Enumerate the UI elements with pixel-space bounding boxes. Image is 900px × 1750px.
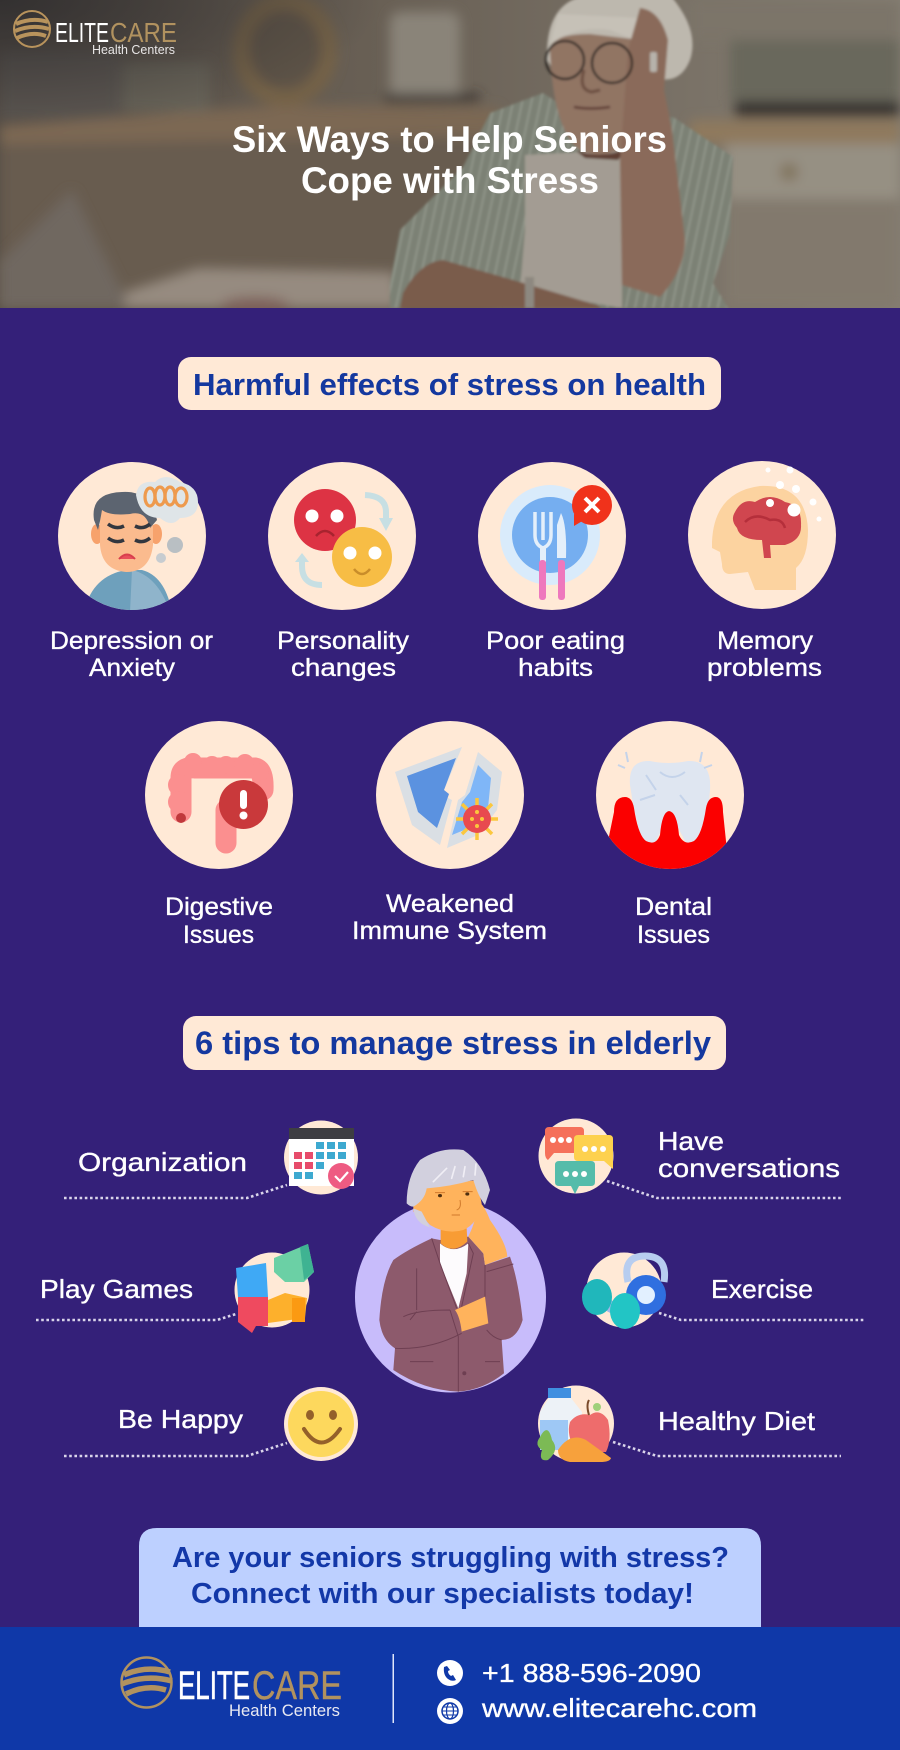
panel: personality changes: [268, 462, 416, 610]
icon: globe: [437, 1698, 463, 1724]
label: personality changes: [277, 627, 410, 682]
logo: footer: Health Centers: [229, 1701, 340, 1720]
panel: poor eating habits: [478, 462, 626, 610]
tip: organization: [78, 1120, 358, 1194]
tip: be happy: [118, 1387, 358, 1461]
icon: calendar: [284, 1120, 358, 1194]
label: memory problems: Memory: [717, 627, 814, 655]
logo: top: CARE: [110, 17, 177, 48]
heading: 6 tips: [183, 1016, 726, 1070]
dotted connector lines: [36, 1181, 864, 1456]
label: digestive issues: Issues: [183, 921, 254, 949]
contact: phone number: +1 888-596-2090: [482, 1658, 701, 1688]
tip: have conversations: Have: [658, 1126, 724, 1156]
callout: connect with specialists: Are your seniors struggling with stress?: [172, 1542, 729, 1574]
label: digestive issues: [165, 893, 273, 949]
label: personality changes: Personality: [277, 627, 410, 655]
label: digestive issues: Digestive: [165, 893, 273, 921]
tip: organization: Organization: [78, 1147, 247, 1177]
label: weakened immune system: Weakened: [386, 890, 514, 918]
logo: top: ELITE: [55, 17, 109, 48]
contact: website: www.elitecarehc.com: [481, 1693, 757, 1723]
icon: phone: [437, 1660, 463, 1686]
label: weakened immune system: Immune System: [352, 917, 547, 945]
label: memory problems: problems: [707, 654, 822, 682]
panel: depression or anxiety: [58, 462, 206, 612]
icon: puzzle pieces: [234, 1244, 314, 1333]
heading: 6 tips: 6 tips to manage stress in elderly: [195, 1025, 711, 1061]
label: personality changes: changes: [291, 654, 396, 682]
tip: play games: [40, 1244, 314, 1333]
icon: smiley: [284, 1387, 358, 1461]
logo: top: Health Centers: [92, 43, 175, 57]
hero photo banner: [0, 0, 900, 315]
label: memory problems: [707, 627, 822, 682]
panel: weakened immune system: [376, 721, 524, 869]
label: dental issues: Issues: [637, 921, 710, 949]
tip: have conversations: [538, 1118, 840, 1194]
label: poor eating habits: habits: [518, 654, 593, 682]
label: depression or anxiety: Anxiety: [89, 654, 176, 682]
callout: connect with specialists: Connect with our specialists today!: [191, 1578, 694, 1610]
icon: dumbbell and kettlebell: [582, 1252, 666, 1329]
label: depression or anxiety: [50, 627, 213, 682]
tip: exercise: [582, 1252, 813, 1329]
logo: top: [14, 11, 177, 57]
title: Six Ways to Help Seniors: [232, 119, 667, 160]
tip: healthy diet: Healthy Diet: [658, 1406, 816, 1436]
panel: memory problems: [688, 461, 836, 609]
icon: chat bubbles: [538, 1118, 614, 1194]
tip: be happy: Be Happy: [118, 1404, 243, 1434]
title: [232, 119, 667, 201]
tip: healthy diet: [537, 1386, 816, 1462]
tip: exercise: Exercise: [711, 1274, 813, 1304]
label: poor eating habits: [486, 627, 625, 682]
tip: play games: Play Games: [40, 1274, 193, 1304]
label: dental issues: [635, 893, 712, 949]
callout: connect with specialists: [139, 1528, 761, 1627]
heading: harmful effects: Harmful effects of stress on health: [193, 367, 706, 402]
icon: milk, apple, carrot: [537, 1386, 614, 1462]
logo: footer: CARE: [252, 1664, 342, 1708]
label: depression or anxiety: Depression or: [50, 627, 213, 655]
label: weakened immune system: [352, 890, 547, 945]
label: dental issues: Dental: [635, 893, 712, 921]
footer: [0, 1627, 900, 1750]
panel: dental issues: [596, 721, 744, 880]
central figure: thinking senior woman: [355, 1149, 546, 1392]
title: Cope with Stress: [301, 160, 599, 201]
panel: digestive issues: [145, 721, 293, 869]
tip: have conversations: conversations: [658, 1153, 840, 1183]
logo: footer: ELITE: [178, 1664, 250, 1708]
label: poor eating habits: Poor eating: [486, 627, 625, 655]
logo: footer: [122, 1658, 342, 1720]
heading: harmful effects: [178, 357, 721, 410]
